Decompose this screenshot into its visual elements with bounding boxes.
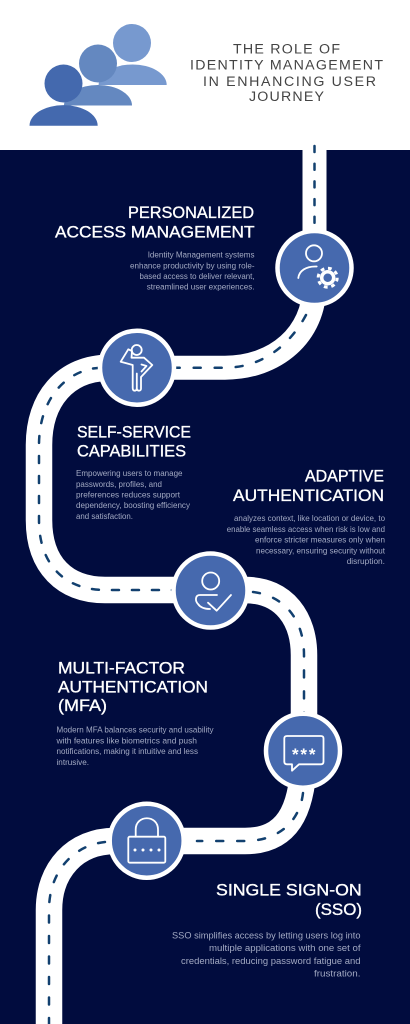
text block: credentials, reducing password fatigue and xyxy=(181,956,360,967)
text block: and satisfaction. xyxy=(76,511,133,521)
heading xyxy=(233,467,384,505)
icon: password speech bubble xyxy=(266,714,340,788)
heading xyxy=(58,658,208,715)
heading: CAPABILITIES xyxy=(77,442,186,461)
icon: password speech bubble: *** xyxy=(292,745,317,764)
title: THE ROLE OF xyxy=(233,42,340,58)
heading xyxy=(77,423,191,461)
text block xyxy=(56,725,214,767)
icon: padlock xyxy=(110,804,184,878)
heading: AUTHENTICATION xyxy=(233,486,384,505)
heading: (SSO) xyxy=(315,900,362,919)
title: JOURNEY xyxy=(249,89,325,105)
panel: adaptive authentication xyxy=(174,467,386,628)
icon: three users header graphic xyxy=(30,24,167,126)
text block: Identity Management systems xyxy=(148,250,255,260)
text block: notifications, making it intuitive and less xyxy=(56,746,199,756)
icon: user with check xyxy=(174,554,248,628)
text block: enforce stricter measures only when xyxy=(255,534,385,544)
text block: streamlined user experiences. xyxy=(147,282,254,292)
text block: multiple applications with one set of xyxy=(209,943,361,954)
heading: AUTHENTICATION xyxy=(58,677,208,696)
text block: intrusive. xyxy=(56,757,89,767)
icon: user with gear xyxy=(278,231,352,305)
heading: ACCESS MANAGEMENT xyxy=(55,223,255,242)
text block: disruption. xyxy=(347,556,385,566)
text block: dependency, boosting efficiency xyxy=(76,500,191,510)
text block xyxy=(227,513,386,566)
text block: enable seamless access when risk is low and xyxy=(227,524,385,534)
text block: frustration. xyxy=(314,969,360,980)
text block: SSO simplifies access by letting users log into xyxy=(172,930,360,941)
heading: MULTI-FACTOR xyxy=(58,658,185,677)
text block: analyzes context, like location or device, to xyxy=(234,513,385,523)
heading: (MFA) xyxy=(58,696,107,715)
text block xyxy=(130,250,255,292)
text block: passwords, profiles, and xyxy=(76,479,162,489)
winding road xyxy=(39,140,314,1024)
panel: single sign-on xyxy=(110,804,362,980)
text block: necessary, ensuring security without xyxy=(256,545,386,555)
heading xyxy=(55,203,255,242)
text block: Empowering users to manage xyxy=(76,468,183,478)
text block: based access to deliver relevant, xyxy=(140,271,254,281)
heading xyxy=(216,881,362,919)
text block: with features like biometrics and push xyxy=(56,735,197,745)
heading: SINGLE SIGN-ON xyxy=(216,881,362,900)
title: IN ENHANCING USER xyxy=(203,74,376,90)
title: IDENTITY MANAGEMENT xyxy=(190,58,383,74)
text block: Modern MFA balances security and usability xyxy=(56,725,214,735)
text block: enhance productivity by using role- xyxy=(130,261,255,271)
heading: SELF-SERVICE xyxy=(77,423,191,442)
title xyxy=(190,42,383,105)
text block xyxy=(76,468,191,521)
panel: self-service capabilities xyxy=(76,331,191,521)
heading: ADAPTIVE xyxy=(305,467,384,486)
heading: PERSONALIZED xyxy=(128,203,254,222)
text block: preferences reduces support xyxy=(76,490,181,500)
icon: standing person xyxy=(100,331,174,405)
panel: multi-factor authentication xyxy=(56,658,340,788)
panel: personalized access management xyxy=(55,203,352,305)
text block xyxy=(172,930,361,980)
